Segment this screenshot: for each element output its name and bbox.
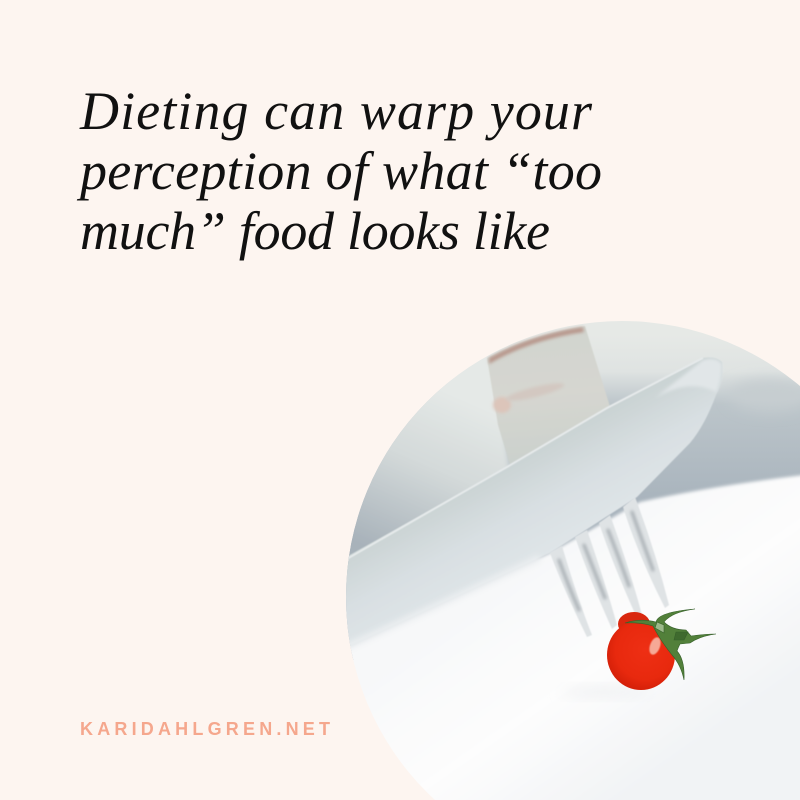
rear knife blade (487, 326, 611, 465)
plate (330, 472, 800, 800)
tomato calyx (625, 609, 716, 680)
photo backdrop (330, 300, 800, 660)
title: perception of what “too (76, 141, 602, 201)
title (76, 81, 602, 261)
fork tine shading (559, 512, 653, 610)
title: much” food looks like (80, 201, 550, 261)
front knife blade (330, 358, 722, 655)
infographic canvas (76, 93, 800, 800)
website footer: KARIDAHLGREN.NET (80, 719, 330, 739)
title: Dieting can warp your (79, 81, 593, 141)
fork tines (550, 497, 669, 637)
tomato shadow (560, 688, 650, 696)
circular photo: fork, knife and tomato (330, 300, 800, 800)
tomato (607, 609, 716, 690)
